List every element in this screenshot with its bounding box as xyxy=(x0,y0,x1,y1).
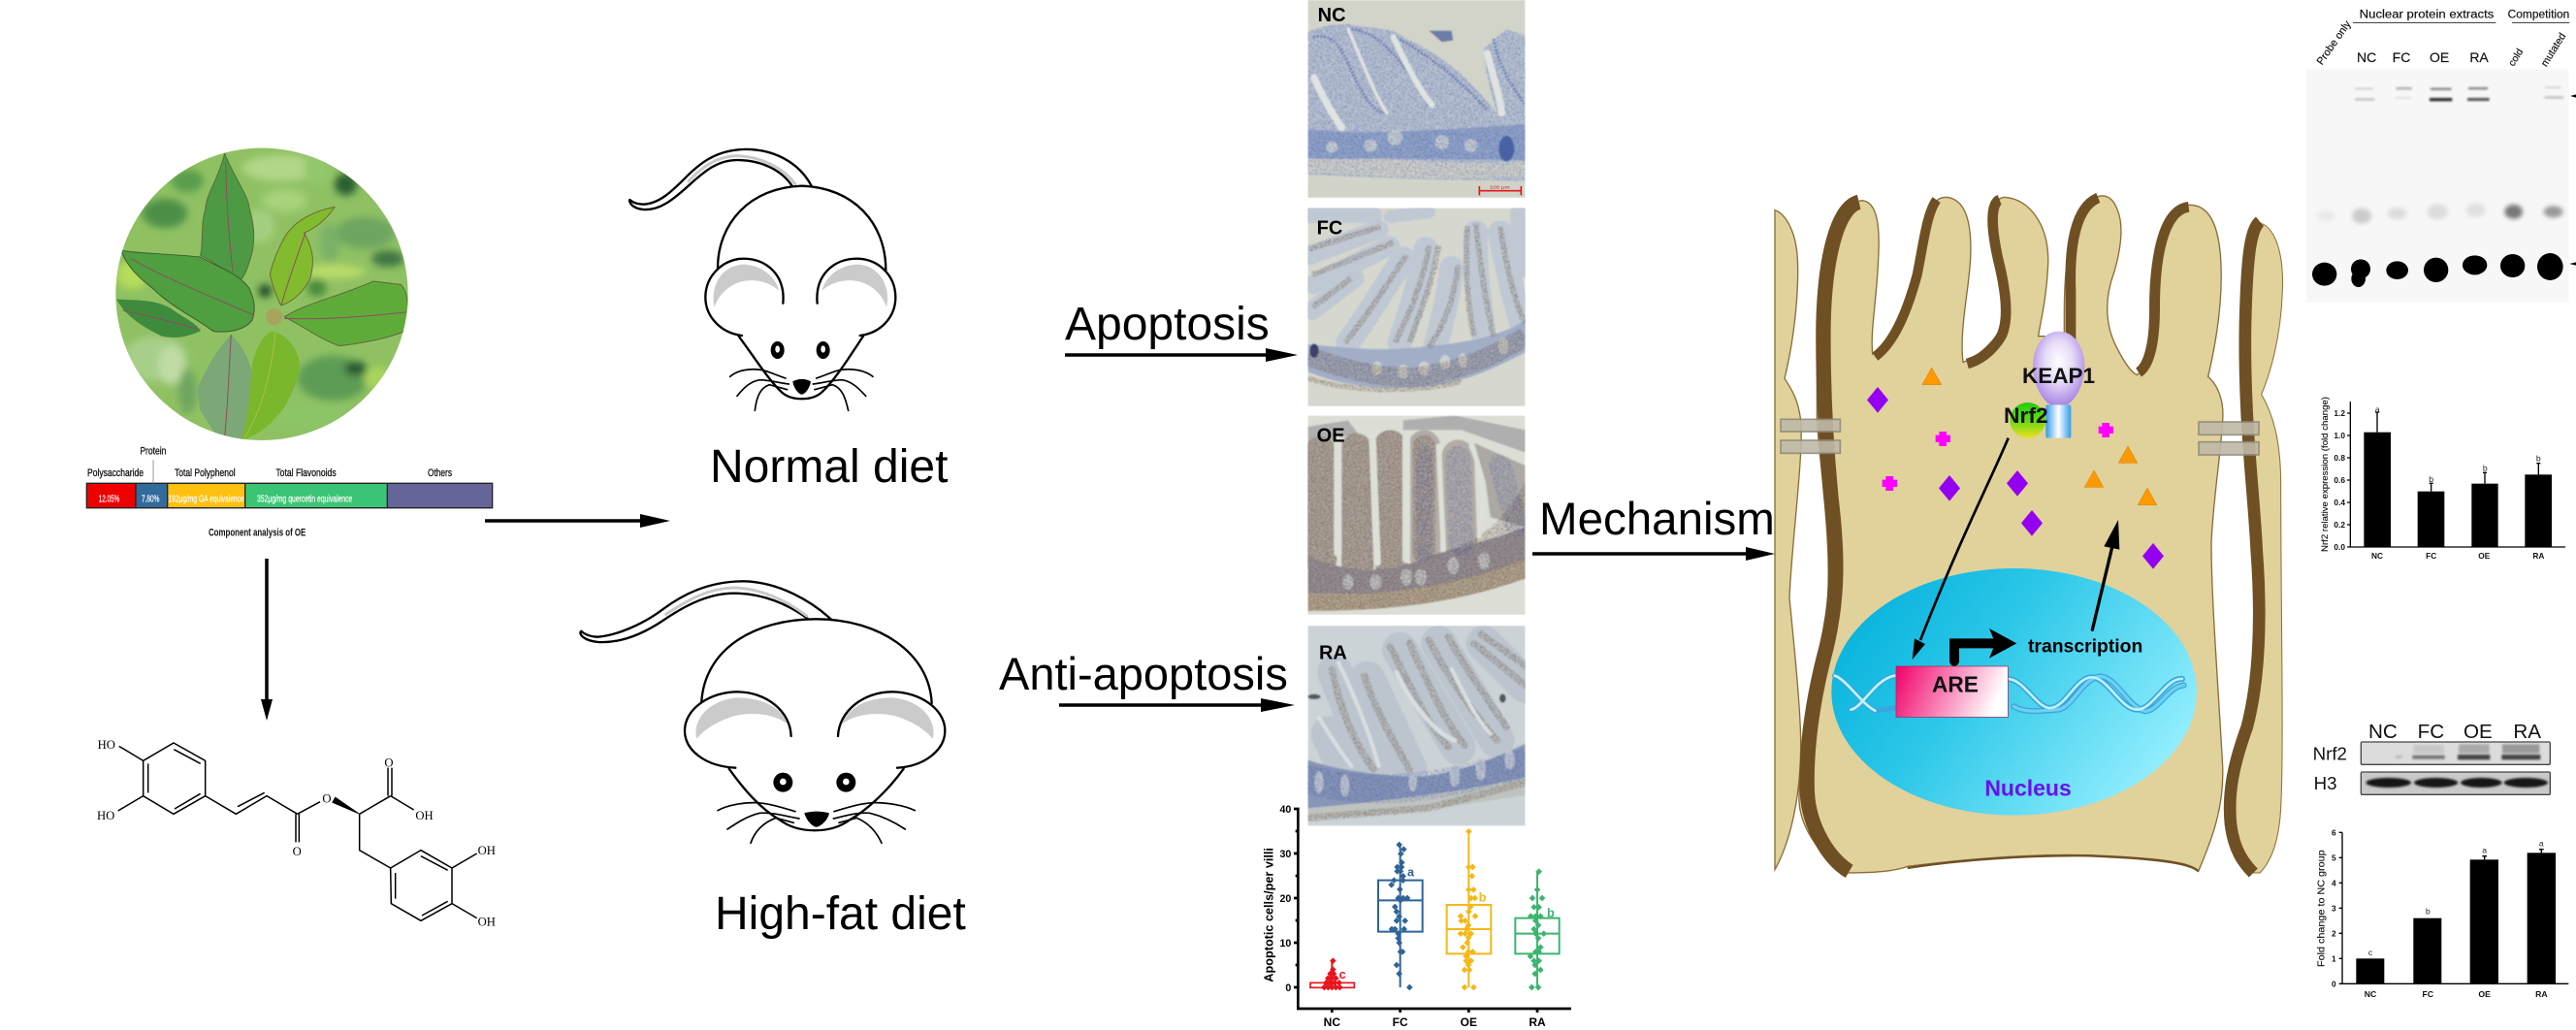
molecules: orange triangles xyxy=(1922,368,2157,505)
chemical structure: rosmarinic acid: HO xyxy=(97,809,114,822)
label: normal diet: Normal diet xyxy=(710,441,948,493)
bars: a xyxy=(2375,404,2380,414)
arrow: transcription product to cytoplasm xyxy=(2092,520,2119,629)
component analysis stacked bar: Others xyxy=(428,467,452,479)
component analysis stacked bar: 12.05% xyxy=(99,495,119,505)
bars: b xyxy=(2429,474,2433,484)
icon: normal diet mouse xyxy=(629,149,895,410)
component analysis stacked bar: 7.80% xyxy=(142,495,159,505)
chart: fold change to NC group: OE xyxy=(2478,989,2491,999)
gel labels: Probe only xyxy=(2315,18,2354,67)
ARE element xyxy=(1896,666,2008,717)
chart: fold change to NC group: b xyxy=(2426,906,2431,916)
nucleus xyxy=(1831,568,2197,816)
group FC: a xyxy=(1407,865,1415,879)
component analysis stacked bar: Total Flavonoids xyxy=(275,467,337,479)
chart: fold change to NC group: 5 xyxy=(2332,853,2336,862)
gel labels: RA xyxy=(2469,49,2489,65)
scale bar: 100 μm xyxy=(1490,184,1510,190)
chart: fold change to NC group: 6 xyxy=(2332,827,2336,837)
panel: histology NC and FC xyxy=(1307,0,1526,406)
chart: fold change to NC group: RA xyxy=(2535,989,2548,999)
left neighbouring cell xyxy=(1775,210,1801,870)
gel labels: FC xyxy=(2393,49,2410,65)
blot lane labels: Nrf2 xyxy=(2313,743,2347,763)
leaf upper right xyxy=(270,207,335,306)
gel labels: mutated xyxy=(2539,31,2568,69)
chemical structure: rosmarinic acid: O xyxy=(293,845,302,858)
KEAP1 protein xyxy=(2022,332,2095,438)
axes: 0.2 xyxy=(2334,520,2345,530)
axes: OE xyxy=(2478,551,2491,561)
plant photograph xyxy=(113,145,410,443)
component analysis stacked bar: Component analysis of OE xyxy=(209,527,306,538)
axes xyxy=(2320,397,2565,561)
group NC xyxy=(1310,960,1354,987)
bars: b xyxy=(2536,454,2541,464)
group RA: b xyxy=(1547,907,1555,920)
leaf lower centre xyxy=(241,332,300,439)
KEAP1 protein: KEAP1 xyxy=(2022,364,2095,388)
chemical structure: rosmarinic acid: O xyxy=(384,756,393,769)
group NC: c xyxy=(1339,968,1346,982)
arrow: Nrf2 to ARE xyxy=(1913,438,2009,660)
label: high-fat diet: High-fat diet xyxy=(715,888,966,940)
axes: 20 xyxy=(1279,893,1291,905)
gel labels: NC xyxy=(2357,49,2376,65)
micrograph: OE xyxy=(1307,415,1526,615)
scale bar xyxy=(1479,184,1521,195)
axes: Apoptotic cells/per villi xyxy=(1263,848,1276,982)
chemical structure: rosmarinic acid xyxy=(97,738,496,929)
label: RA: RA xyxy=(1319,642,1347,663)
panel: cell mechanism diagram xyxy=(1775,196,2282,873)
chart: fold change to NC group: FC xyxy=(2423,989,2434,999)
molecules: purple diamonds xyxy=(1867,387,2164,569)
micrograph: RA xyxy=(1307,626,1526,826)
chart: fold change to NC group: c xyxy=(2368,948,2373,957)
label: OE: OE xyxy=(1317,426,1345,447)
component analysis stacked bar xyxy=(86,445,493,538)
chart: fold change to NC group: 2 xyxy=(2332,928,2336,938)
group FC xyxy=(1378,845,1423,987)
axes: FC xyxy=(1393,1015,1408,1029)
panel: EMSA gel xyxy=(2306,7,2576,303)
component analysis stacked bar: Total Polyphenol xyxy=(175,467,236,479)
leaf large left xyxy=(121,250,254,332)
arrow: apoptosis xyxy=(1065,348,1298,362)
axes: NC xyxy=(1324,1015,1340,1029)
chart: fold change to NC group xyxy=(2317,827,2568,999)
arrow: mechanism xyxy=(1532,547,1775,561)
label: transcription: transcription xyxy=(2028,637,2142,658)
chemical structure: rosmarinic acid: OH xyxy=(478,844,496,857)
chart: fold change to NC group: 4 xyxy=(2332,878,2336,887)
leaf lower left centre xyxy=(197,335,254,441)
tight junction bars xyxy=(1781,419,2259,455)
label: FC: FC xyxy=(1317,217,1342,239)
label: anti-apoptosis: Anti-apoptosis xyxy=(999,648,1288,699)
arrow: plant to rosmarinic acid xyxy=(261,559,273,721)
component analysis stacked bar: 192μg/mg GA equivalence xyxy=(168,495,244,505)
group OE xyxy=(1447,831,1491,987)
axes: 40 xyxy=(1279,804,1291,816)
band pointers xyxy=(2569,94,2576,266)
component analysis stacked bar: 352μg/mg quercetin equivalence xyxy=(257,495,353,505)
panel: Nrf2 western blot xyxy=(2313,721,2568,999)
right neighbouring cell xyxy=(2230,221,2282,873)
gel bands xyxy=(2312,86,2563,287)
label: NC: NC xyxy=(1318,5,1346,26)
label: apoptosis: Apoptosis xyxy=(1065,299,1270,350)
chart: fold change to NC group: 1 xyxy=(2332,953,2336,963)
chemical structure: rosmarinic acid: HO xyxy=(98,738,115,752)
main cell body xyxy=(1799,196,2223,873)
axes: 1.0 xyxy=(2334,431,2345,440)
chart: apoptotic cells box plot xyxy=(1263,804,1571,1029)
axes: 0 xyxy=(1285,982,1291,994)
icon: high-fat diet mouse xyxy=(580,581,945,843)
blot lane labels: RA xyxy=(2513,721,2541,743)
leaf bud xyxy=(266,308,282,325)
chart: fold change to NC group: 0 xyxy=(2332,979,2336,988)
axes: RA xyxy=(1529,1015,1546,1029)
chart: fold change to NC group: Fold change to NC group xyxy=(2317,850,2328,967)
leaf right xyxy=(284,281,408,346)
label: mechanism: Mechanism xyxy=(1539,494,1775,545)
chart: Nrf2 relative expression xyxy=(2320,397,2565,561)
leaf upper xyxy=(201,153,254,281)
axes: 0.0 xyxy=(2334,542,2345,552)
group RA xyxy=(1515,871,1560,987)
axes xyxy=(1263,804,1571,1029)
bars: b xyxy=(2483,464,2488,473)
gel background xyxy=(2306,70,2569,303)
H3 blot xyxy=(2361,772,2550,794)
axes: NC xyxy=(2371,551,2383,561)
axes: Nrf2 relative expression (fold change) xyxy=(2320,397,2330,552)
label: nucleus: Nucleus xyxy=(1984,776,2072,801)
chart: fold change to NC group: a xyxy=(2482,846,2487,855)
chart: fold change to NC group: a xyxy=(2539,839,2544,849)
gel labels: Competition xyxy=(2508,7,2569,20)
blot lane labels: FC xyxy=(2418,721,2444,743)
brown brush border stripes xyxy=(1807,198,2199,871)
component analysis stacked bar: Polysaccharide xyxy=(87,467,144,479)
component analysis stacked bar: Protein xyxy=(140,445,166,457)
group OE: b xyxy=(1479,890,1487,904)
molecules: magenta plus signs xyxy=(1883,423,2113,491)
blot lane labels: OE xyxy=(2463,721,2493,743)
gel labels: OE xyxy=(2430,49,2449,65)
Nrf2 blot xyxy=(2361,742,2550,764)
gel labels: cold xyxy=(2507,47,2526,69)
axes: 1.2 xyxy=(2334,408,2345,418)
chart: fold change to NC group: NC xyxy=(2365,989,2377,999)
blot lane labels: NC xyxy=(2368,721,2398,743)
chart: fold change to NC group: 3 xyxy=(2332,903,2336,913)
bars xyxy=(2364,404,2552,547)
axes: 10 xyxy=(1279,938,1291,950)
transcription start arrow xyxy=(1954,628,2016,661)
micrograph: FC xyxy=(1307,208,1526,406)
chemical structure: rosmarinic acid: O xyxy=(322,792,331,806)
axes: OE xyxy=(1461,1015,1477,1029)
axes: FC xyxy=(2426,551,2436,561)
gel labels xyxy=(2315,7,2569,69)
panel: histology OE and RA xyxy=(1307,415,1526,826)
arrow: anti-apoptosis xyxy=(1059,698,1295,712)
chemical structure: rosmarinic acid: OH xyxy=(415,809,434,822)
ARE element: ARE xyxy=(1932,671,1979,696)
axes: 0.4 xyxy=(2334,498,2345,507)
DNA helix xyxy=(1835,676,2184,711)
blot lane labels: H3 xyxy=(2314,773,2337,793)
blot lane labels xyxy=(2313,721,2541,793)
panel: plant photograph and component analysis xyxy=(86,145,493,538)
axes: 0.8 xyxy=(2334,453,2345,463)
gel labels: Nuclear protein extracts xyxy=(2360,7,2494,20)
micrograph: NC xyxy=(1307,0,1526,198)
chemical structure: rosmarinic acid: OH xyxy=(478,916,496,929)
Nrf2 protein: Nrf2 xyxy=(2004,403,2048,428)
leaf veins xyxy=(123,162,408,438)
Nrf2 protein xyxy=(2004,402,2048,438)
axes: 30 xyxy=(1279,849,1291,860)
leaf lower left xyxy=(116,299,201,338)
axes: RA xyxy=(2532,551,2544,561)
arrow: plant to normal diet xyxy=(485,514,670,528)
axes: 0.6 xyxy=(2334,475,2345,485)
